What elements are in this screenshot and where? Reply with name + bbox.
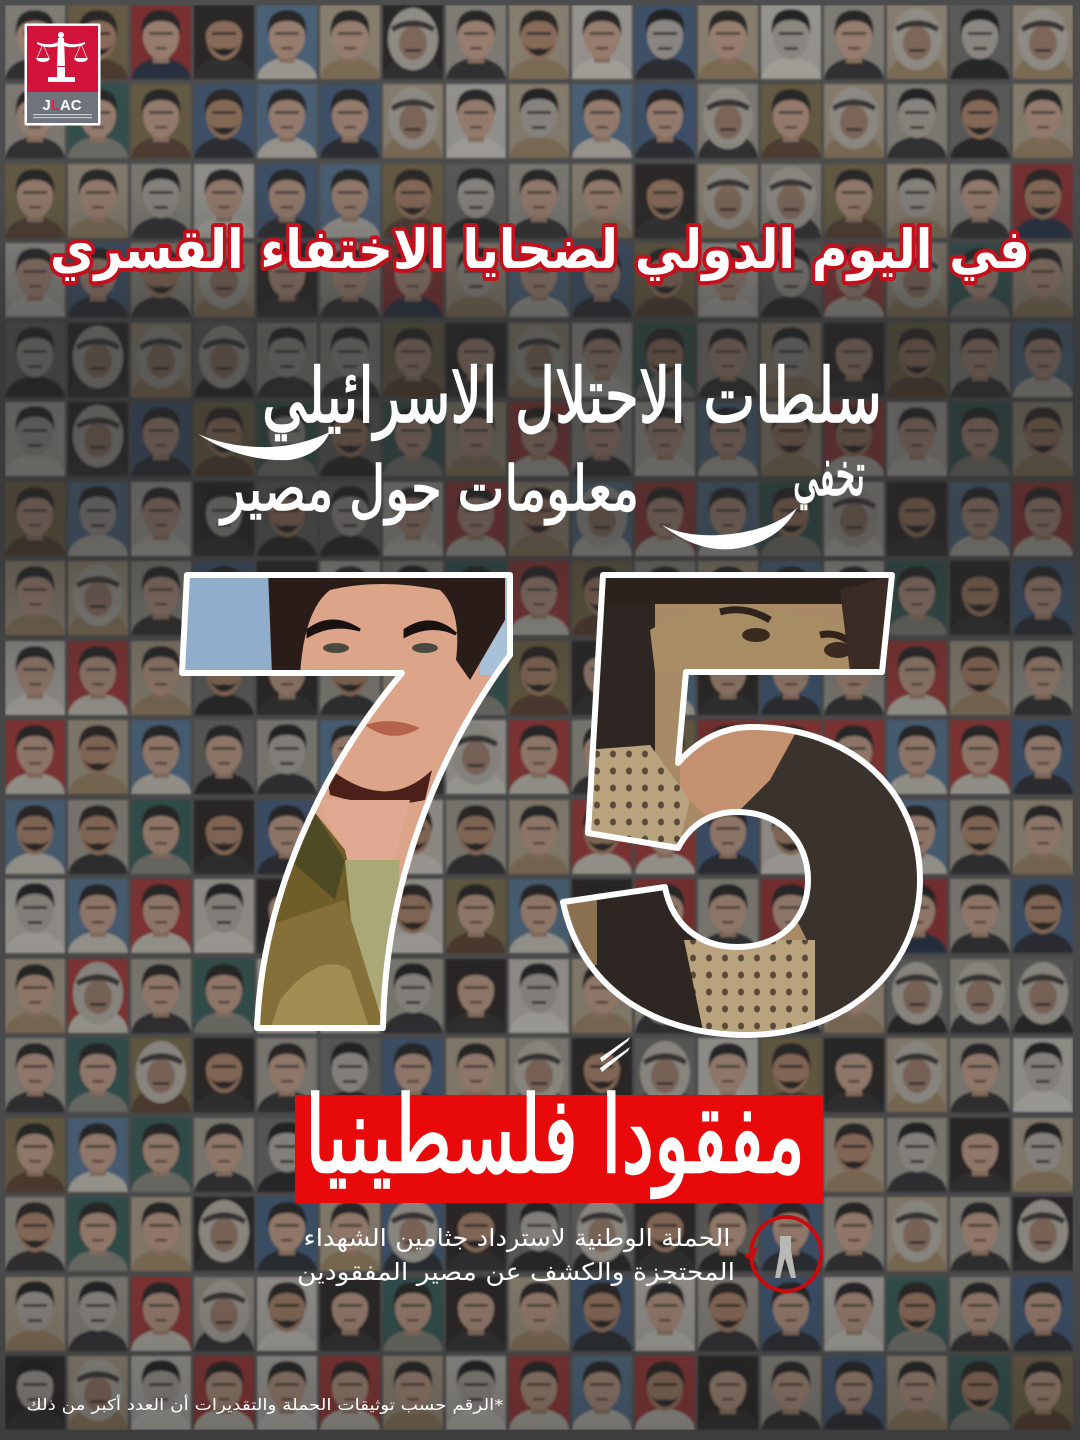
subheading: first line xyxy=(198,351,882,460)
digit 7 with portrait xyxy=(180,570,520,1040)
subheading: second line: معلومات حول مصير xyxy=(219,452,639,525)
logo wordmark: JLAC xyxy=(42,97,82,114)
tanween mark xyxy=(600,1037,630,1072)
big number 75 filled with portraits xyxy=(180,570,925,1040)
footnote: *الرقم حسب توثيقات الحملة والتقديرات أن العدد أكبر من ذلك xyxy=(26,1394,504,1415)
red banner xyxy=(295,1037,823,1203)
digit 5 with portrait xyxy=(555,570,925,1040)
icon: campaign emblem in red circle xyxy=(744,1217,821,1291)
campaign text: المحتجزة والكشف عن مصير المفقودين xyxy=(297,1258,735,1286)
banner text: مفقودا فلسطينيا xyxy=(305,1074,805,1198)
subheading: second line xyxy=(219,440,865,549)
logo: JLAC xyxy=(24,24,100,126)
icon: scales of justice xyxy=(36,32,88,82)
campaign text xyxy=(297,1224,735,1286)
subheading: second line: تخفي xyxy=(793,440,865,510)
campaign text: الحملة الوطنية لاسترداد جثامين الشهداء xyxy=(304,1224,730,1252)
